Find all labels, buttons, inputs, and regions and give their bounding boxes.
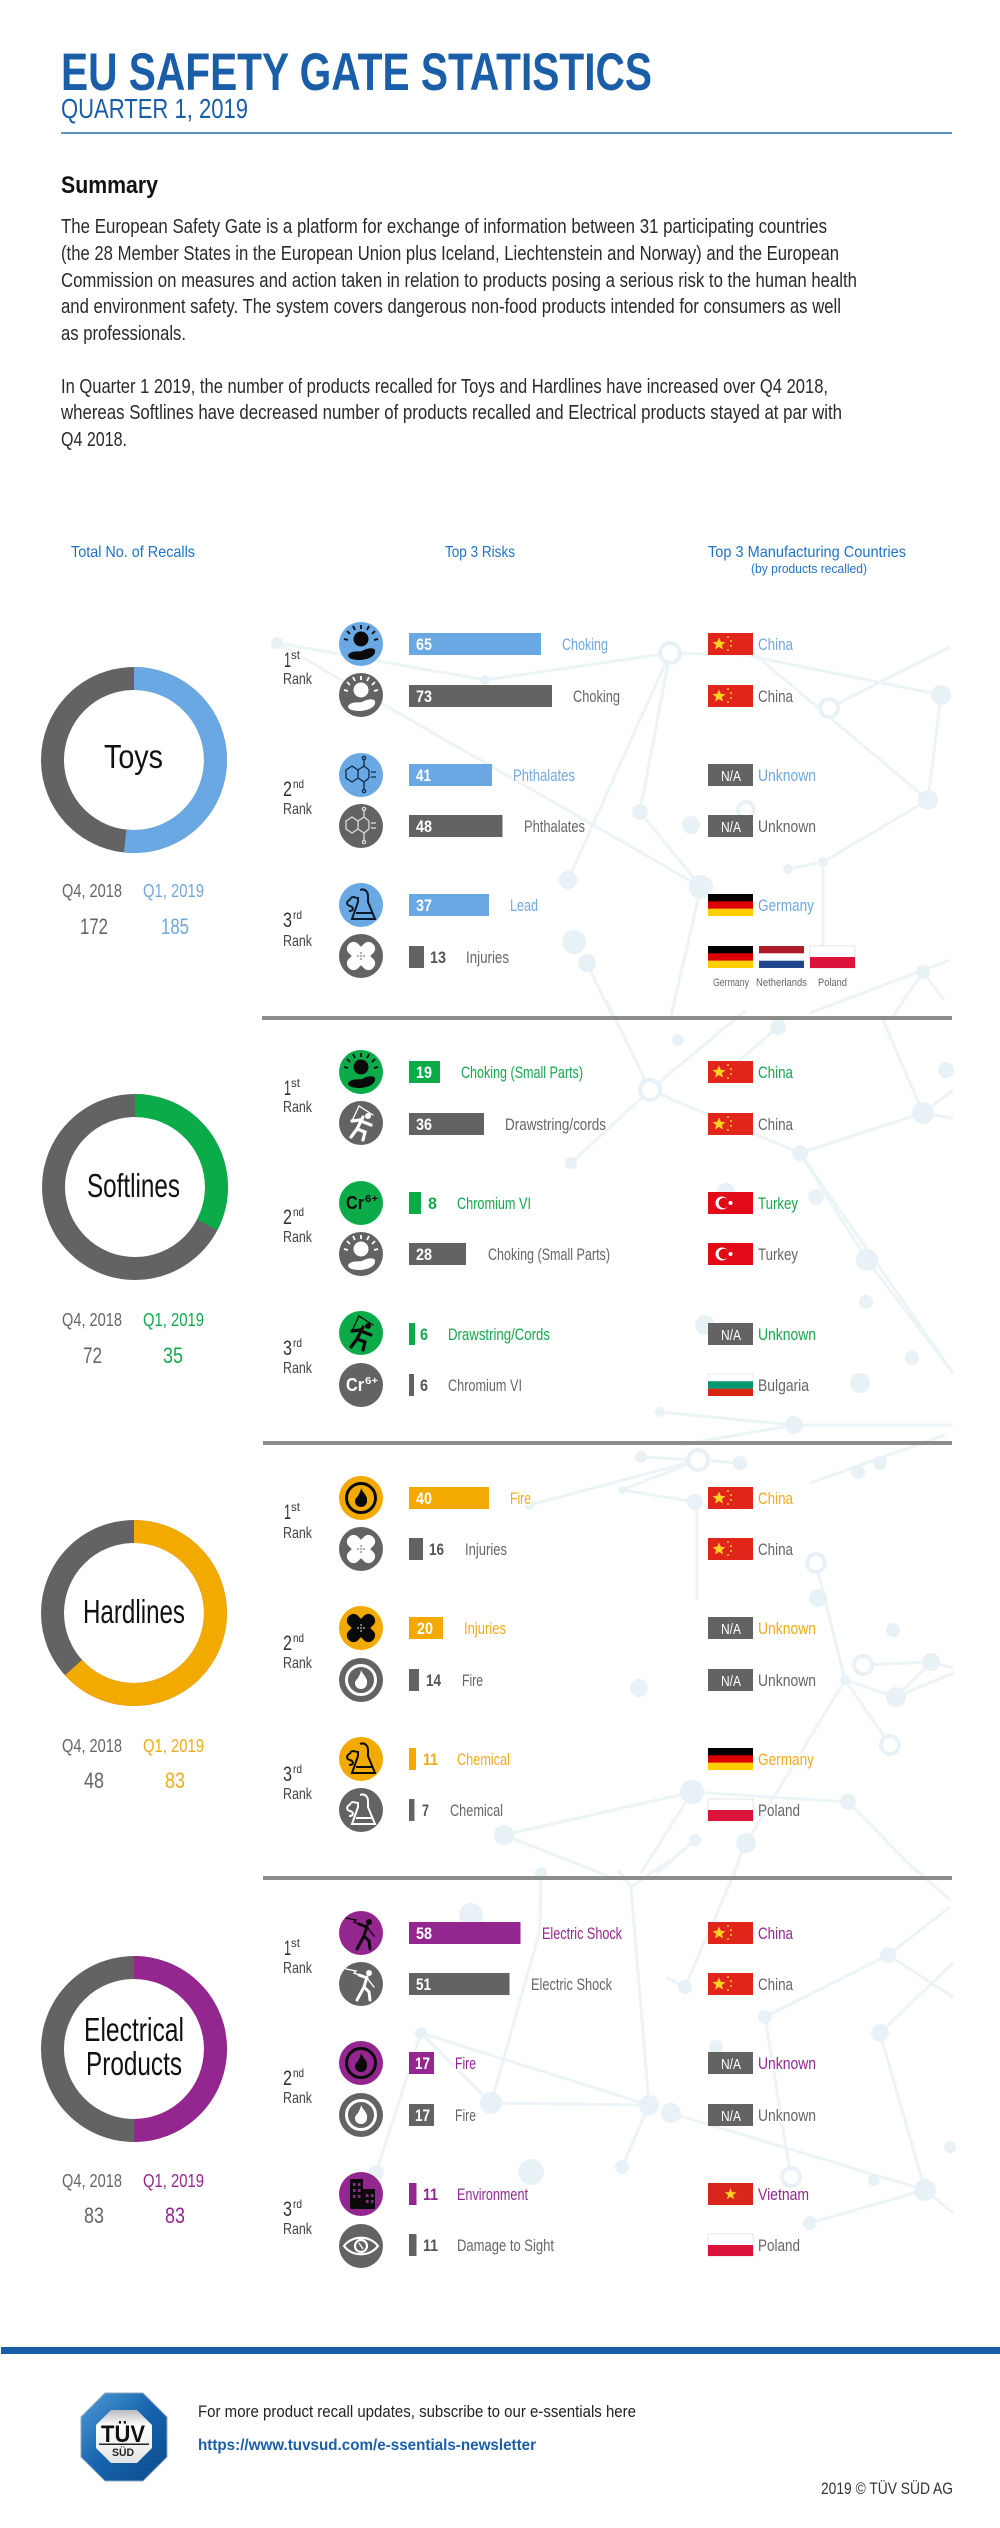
rank labels: electrical products: nd (293, 2066, 304, 2080)
recall totals: electrical products: 83 (165, 2203, 185, 2228)
row: lead q1: Lead (510, 896, 538, 915)
column heading: top risks: Top 3 Risks (445, 544, 515, 561)
rank labels: electrical products: rd (293, 2197, 302, 2211)
row: chromium q4: Bulgaria (758, 1376, 809, 1395)
rank labels: softlines: Rank (283, 1099, 313, 1116)
row: fire q1: 40 (416, 1489, 432, 1508)
row: lead q1: 37 (416, 896, 432, 915)
rank labels: electrical products: 1 (284, 1937, 291, 1960)
row: chemical q1: Germany (758, 1750, 814, 1769)
row: choking small parts q4: Turkey (758, 1245, 798, 1264)
rank labels: softlines: 3 (283, 1337, 292, 1360)
logo: TÜV SÜD: TÜV (101, 2421, 145, 2448)
row: chromium q4: Cr (346, 1375, 364, 1395)
recall totals: hardlines: 83 (165, 1768, 185, 1793)
row: damage to sight q4: Damage to Sight (457, 2236, 554, 2255)
row: electric shock q4: China (758, 1975, 793, 1994)
donut: toys: Toys (104, 738, 163, 775)
row: phthalates q1: N/A (721, 768, 741, 785)
footer link: https://www.tuvsud.com/e-ssentials-newsletter (198, 2437, 536, 2454)
rank labels: softlines: nd (293, 1205, 304, 1219)
divider (263, 1441, 952, 1445)
rank labels: toys: nd (293, 777, 304, 791)
column heading: manufacturing countries: Top 3 Manufacturing Countries (708, 544, 906, 561)
rank labels: softlines: 1 (284, 1077, 291, 1100)
row: phthalates q1: Unknown (758, 766, 816, 785)
summary paragraph 1: (the 28 Member States in the European Union plus Iceland, Liechtenstein and Norway) and the European (61, 243, 839, 265)
summary paragraph 1 (61, 216, 857, 345)
row: choking q4 (339, 673, 793, 717)
row: choking q4: Choking (573, 687, 620, 706)
summary paragraph 1: as professionals. (61, 323, 186, 345)
row: chromium q1: 8 (428, 1194, 437, 1213)
row: injuries q4 (339, 1527, 793, 1571)
row: choking q4: China (758, 687, 793, 706)
rank labels: toys: Rank (283, 801, 313, 818)
row: fire q1: Fire (455, 2054, 476, 2073)
row: injuries q4: Poland (818, 977, 847, 989)
donut: hardlines (52, 1532, 216, 1694)
rank labels: hardlines: 3 (283, 1763, 292, 1786)
row: chemical q1: Chemical (457, 1750, 510, 1769)
rank labels: electrical products: 2 (283, 2067, 292, 2090)
rank labels: electrical products: 3 (283, 2198, 292, 2221)
row: drawstring q1: Unknown (758, 1325, 816, 1344)
row: fire q4: N/A (721, 1673, 741, 1690)
summary paragraph 1: The European Safety Gate is a platform for exchange of information between 31 participating countries (61, 216, 827, 238)
donut: softlines (54, 1106, 216, 1268)
row: damage to sight q4: 11 (423, 2236, 438, 2255)
recall totals: toys: 185 (161, 914, 189, 939)
row: fire q4: Fire (462, 1671, 483, 1690)
row: fire q4 (339, 1658, 816, 1702)
row: choking q1 (339, 622, 793, 666)
subtitle: QUARTER 1, 2019 (61, 93, 248, 124)
footer text: For more product recall updates, subscribe to our e-ssentials here (198, 2402, 636, 2421)
row: chromium q4: 6+ (365, 1376, 378, 1387)
row: injuries q4: Injuries (465, 1540, 507, 1559)
row: chromium q1: Cr (346, 1193, 364, 1213)
rank labels: toys: 2 (283, 778, 292, 801)
row: drawstring q1 (339, 1311, 816, 1355)
row: phthalates q1: Phthalates (513, 766, 575, 785)
recall totals: electrical products: Q4, 2018 (62, 2171, 122, 2191)
row: chromium q1: Turkey (758, 1194, 798, 1213)
title: EU SAFETY GATE STATISTICS (61, 43, 652, 102)
rank labels: toys: 3 (283, 909, 292, 932)
row: phthalates q1 (339, 753, 816, 797)
row: electric shock q1: Electric Shock (542, 1924, 622, 1943)
row: injuries q4: Germany (713, 977, 749, 989)
row: choking small parts q4 (339, 1232, 798, 1276)
row: phthalates q4: 48 (416, 817, 432, 836)
row: phthalates q4 (339, 804, 816, 848)
row: fire q4: 17 (415, 2106, 430, 2125)
row: phthalates q4: N/A (721, 819, 741, 836)
recall totals: hardlines: Q1, 2019 (143, 1736, 204, 1756)
row: fire q4 (339, 2093, 816, 2137)
row: chemical q4: 7 (422, 1801, 429, 1820)
row: injuries q4: 16 (429, 1540, 444, 1559)
rank labels: hardlines: st (291, 1500, 301, 1514)
background network pattern (271, 637, 956, 2230)
row: choking q1: China (758, 635, 793, 654)
row: fire q1 (339, 1476, 793, 1520)
rank labels: softlines: rd (293, 1336, 302, 1350)
rank labels: hardlines: nd (293, 1631, 304, 1645)
logo: TÜV SÜD: SÜD (112, 2446, 134, 2459)
row: choking small parts q4: 28 (416, 1245, 432, 1264)
donut: hardlines: Hardlines (83, 1593, 185, 1630)
rank labels: softlines: Rank (283, 1229, 313, 1246)
donut: electrical products: Products (86, 2045, 182, 2082)
recall totals: softlines: Q1, 2019 (143, 1310, 204, 1330)
panel: hardlines (52, 1476, 816, 1832)
logo: TÜV SÜD (81, 2393, 167, 2481)
rank labels: hardlines: 1 (284, 1501, 291, 1524)
row: injuries q4: Injuries (466, 948, 509, 967)
row: drawstring q4: 36 (416, 1115, 432, 1134)
rank labels: electrical products: Rank (283, 2221, 313, 2238)
row: chemical q4 (339, 1788, 800, 1832)
divider (263, 1876, 952, 1880)
rank labels: hardlines (283, 1500, 313, 1803)
recall totals: softlines: 72 (83, 1343, 102, 1368)
row: phthalates q4: Phthalates (524, 817, 585, 836)
rank labels: toys: Rank (283, 933, 313, 950)
row: chemical q1: 11 (423, 1750, 438, 1769)
row: fire q1: Fire (510, 1489, 531, 1508)
donut: toys (52, 678, 216, 842)
row: chemical q4: Chemical (450, 1801, 503, 1820)
recall totals: hardlines: Q4, 2018 (62, 1736, 122, 1756)
row: electric shock q4: Electric Shock (531, 1975, 612, 1994)
recall totals: toys: 172 (80, 914, 108, 939)
rank labels: softlines (283, 1076, 313, 1377)
column heading: manufacturing countries: (by products recalled) (751, 561, 867, 576)
row: injuries q1: Unknown (758, 1619, 816, 1638)
row: choking small parts q1: Choking (Small Parts) (461, 1063, 583, 1082)
rank labels: hardlines: rd (293, 1762, 302, 1776)
recall totals: electrical products: 83 (84, 2203, 104, 2228)
row: fire q4: Fire (455, 2106, 476, 2125)
rank labels: softlines: Rank (283, 1360, 313, 1377)
column heading: total recalls: Total No. of Recalls (71, 544, 195, 561)
row: electric shock q4 (339, 1962, 793, 2006)
row: phthalates q4: Unknown (758, 817, 816, 836)
donut: softlines: Softlines (87, 1167, 180, 1204)
header rule (61, 132, 952, 134)
row: choking small parts q1 (339, 1050, 793, 1094)
row: chromium q1: Chromium VI (457, 1194, 531, 1213)
row: fire q1: 17 (415, 2054, 430, 2073)
rank labels: toys: rd (293, 908, 302, 922)
summary paragraph 1: Commission on measures and action taken in relation to products posing a serious risk to the human health (61, 270, 857, 292)
row: injuries q1: Injuries (464, 1619, 506, 1638)
row: fire q4: N/A (721, 2108, 741, 2125)
rank labels: electrical products: Rank (283, 1960, 313, 1977)
row: injuries q4: Netherlands (756, 977, 807, 989)
footer bar (1, 2347, 1000, 2354)
summary heading: Summary (61, 172, 159, 199)
row: drawstring q1: 6 (420, 1325, 428, 1344)
row: fire q4: Unknown (758, 1671, 816, 1690)
row: lead q1: Germany (758, 896, 814, 915)
row: drawstring q4 (339, 1101, 793, 1145)
rank labels: toys (283, 648, 313, 950)
recall totals: electrical products (62, 2171, 204, 2228)
row: drawstring q4: Drawstring/cords (505, 1115, 606, 1134)
rank labels: hardlines: Rank (283, 1786, 313, 1803)
row: electric shock q1: 58 (416, 1924, 432, 1943)
rank labels: hardlines: Rank (283, 1525, 313, 1542)
row: chemical q4: Poland (758, 1801, 800, 1820)
summary paragraph 2: In Quarter 1 2019, the number of products recalled for Toys and Hardlines have increased over Q4 2018, (61, 376, 828, 398)
summary paragraph 2: Q4 2018. (61, 429, 127, 451)
donut: electrical products (52, 1968, 216, 2130)
row: drawstring q1: Drawstring/Cords (448, 1325, 550, 1344)
row: environment q1: 11 (423, 2185, 438, 2204)
row: injuries q4 (339, 934, 855, 989)
recall totals: toys: Q4, 2018 (62, 881, 122, 901)
rank labels: toys: st (291, 648, 301, 662)
row: chromium q1 (339, 1181, 798, 1225)
row: drawstring q1: N/A (721, 1327, 741, 1344)
recall totals: hardlines (62, 1736, 204, 1793)
row: choking small parts q1: 19 (416, 1063, 432, 1082)
row: chromium q4 (339, 1363, 809, 1407)
copyright: 2019 © TÜV SÜD AG (821, 2479, 953, 2498)
rank labels: electrical products (283, 1936, 313, 2238)
row: injuries q1: N/A (721, 1621, 741, 1638)
rank labels: electrical products: Rank (283, 2090, 313, 2107)
row: fire q1: N/A (721, 2056, 741, 2073)
row: choking q1: Choking (562, 635, 608, 654)
recall totals: toys (62, 881, 204, 939)
row: electric shock q1: China (758, 1924, 793, 1943)
row: electric shock q4: 51 (416, 1975, 431, 1994)
row: chemical q1 (339, 1737, 814, 1781)
row: choking small parts q4: Choking (Small Parts) (488, 1245, 610, 1264)
row: injuries q1: 20 (417, 1619, 433, 1638)
row: fire q1: China (758, 1489, 793, 1508)
recall totals: toys: Q1, 2019 (143, 881, 204, 901)
row: choking q1: 65 (416, 635, 432, 654)
row: fire q1 (339, 2041, 816, 2085)
panel: softlines (54, 1050, 816, 1407)
row: fire q4: Unknown (758, 2106, 816, 2125)
rank labels: toys: Rank (283, 671, 313, 688)
row: chromium q4: Chromium VI (448, 1376, 522, 1395)
rank labels: softlines: 2 (283, 1206, 292, 1229)
recall totals: electrical products: Q1, 2019 (143, 2171, 204, 2191)
rank labels: electrical products: st (291, 1936, 301, 1950)
row: chromium q1: 6+ (365, 1194, 378, 1205)
row: chromium q4: 6 (420, 1376, 428, 1395)
rank labels: softlines: st (291, 1076, 301, 1090)
rank labels: hardlines: 2 (283, 1632, 292, 1655)
row: fire q4: 14 (426, 1671, 441, 1690)
donut: electrical products: Electrical (84, 2011, 184, 2048)
row: choking small parts q1: China (758, 1063, 793, 1082)
row: damage to sight q4: Poland (758, 2236, 800, 2255)
row: lead q1 (339, 883, 814, 927)
row: injuries q1 (339, 1606, 816, 1650)
summary paragraph 1: and environment safety. The system covers dangerous non-food products intended for consumers as well (61, 296, 841, 318)
row: environment q1: Environment (457, 2185, 528, 2204)
recall totals: softlines: Q4, 2018 (62, 1310, 122, 1330)
row: injuries q4: 13 (430, 948, 446, 967)
recall totals: softlines (62, 1310, 204, 1368)
summary paragraph 2 (60, 376, 842, 451)
panel: toys (52, 622, 855, 989)
rank labels: toys: 1 (284, 649, 291, 672)
rank labels: hardlines: Rank (283, 1655, 313, 1672)
row: choking q4: 73 (416, 687, 432, 706)
divider (262, 1016, 952, 1020)
row: phthalates q1: 41 (416, 766, 431, 785)
row: environment q1 (339, 2172, 809, 2216)
row: damage to sight q4 (339, 2224, 800, 2268)
row: fire q1: Unknown (758, 2054, 816, 2073)
row: electric shock q1 (339, 1911, 793, 1955)
recall totals: softlines: 35 (163, 1343, 183, 1368)
row: injuries q4: China (758, 1540, 793, 1559)
panel: electrical products (52, 1911, 816, 2268)
recall totals: hardlines: 48 (84, 1768, 104, 1793)
row: drawstring q4: China (758, 1115, 793, 1134)
summary paragraph 2: whereas Softlines have decreased number of products recalled and Electrical products stayed at par with (60, 402, 842, 424)
row: environment q1: Vietnam (758, 2185, 809, 2204)
column heading: manufacturing countries (708, 544, 906, 576)
